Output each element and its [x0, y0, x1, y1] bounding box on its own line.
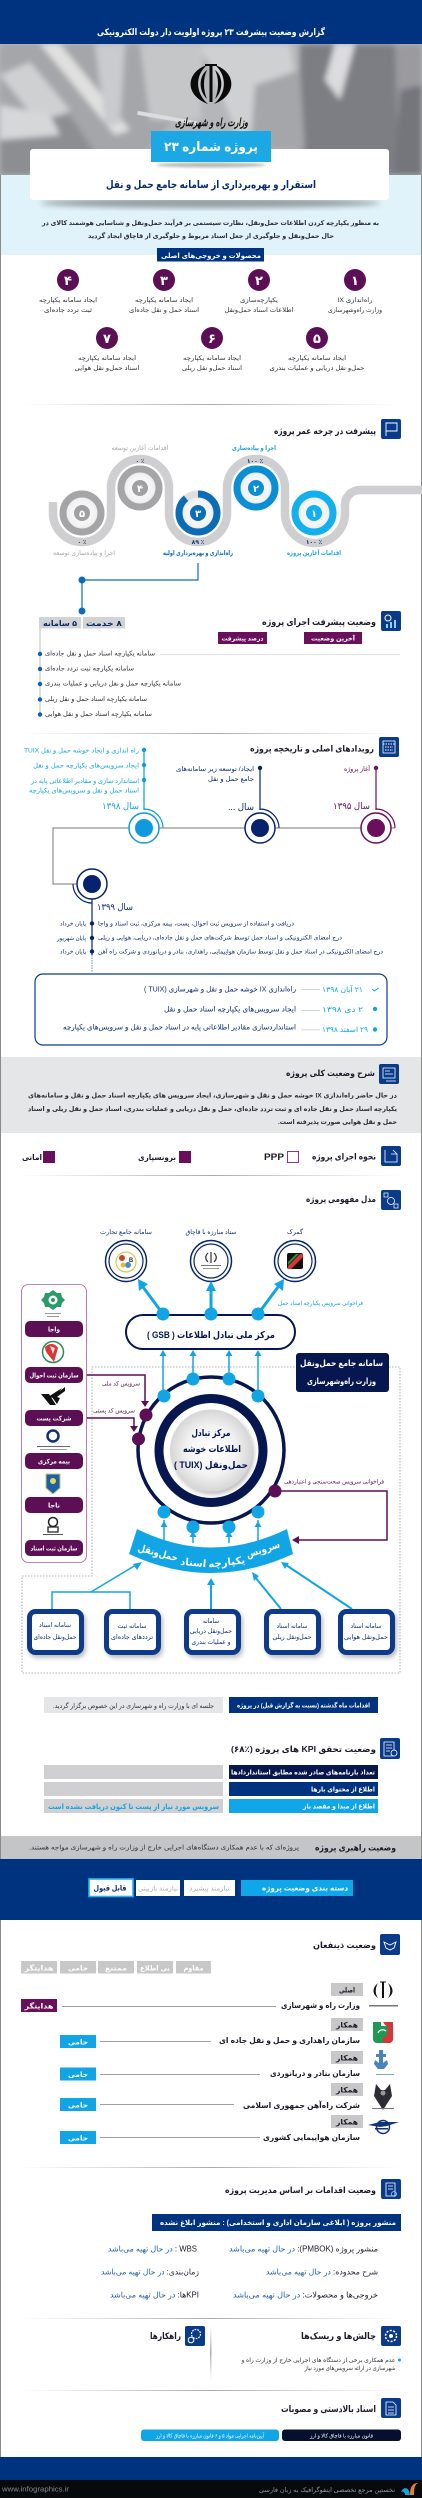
product 6: ایجاد سامانه یکپارچه [183, 355, 241, 362]
milestones box: ایجاد سرویس‌های یکپارچه اسناد حمل و نقل [164, 1004, 296, 1014]
leadership status band [1, 1836, 421, 1859]
node 1395: آغاز پروژه [344, 764, 371, 773]
product 6: ۶ [208, 331, 216, 346]
hero photo [0, 44, 422, 175]
customs [274, 1228, 316, 1282]
stage 2: ۲ [253, 484, 259, 495]
stakeholder: civil aviation: حامی [68, 2136, 88, 2142]
cyan arrows to external systems [143, 1287, 278, 1314]
product 3: اسناد حمل و نقل جاده‌ای [129, 307, 199, 314]
stage 3: ۳ [195, 509, 201, 520]
product 2: ۲ [255, 273, 263, 288]
systems list: سامانه یکپارچه ثبت تردد جاده‌ای [45, 664, 134, 672]
product 3 [129, 269, 199, 314]
customs: گمرک [287, 1228, 303, 1236]
stage 4: اقدامات آغازین توسعه [112, 443, 169, 452]
footer: www.infographics.ir [1, 2484, 70, 2494]
stage 2 [232, 445, 278, 510]
chip: post [25, 1410, 83, 1426]
last month actions: اقدامات ماه گذشته (نسبت به گزارش قبل) در پروژه [237, 1702, 370, 1710]
node 1399: پایان شهریور [56, 936, 86, 942]
chip: documents registry [25, 1540, 83, 1556]
node ...: سال ... [228, 802, 254, 812]
maritime: حمل‌ونقل دریایی [190, 1628, 232, 1635]
integrated service banner: حمل‌ونقل [136, 1543, 179, 1564]
TUIX ring hub: حمل‌ونقل (TUIX ) [174, 1460, 248, 1471]
stakeholder legend: مقاوم [184, 1966, 204, 1972]
KPI rows: سرویس مورد نیاز از پست تا کنون دریافت نشده است [48, 1802, 219, 1811]
milestones box: راه‌اندازی IX خوشه حمل و نقل و شهرسازی (TUIX ) [144, 984, 296, 994]
chip: central insurance [25, 1453, 83, 1469]
section heading: KPI: وضعیت تحقق KPI های پروژه (٪۶۸) [231, 1744, 376, 1755]
footer: نخستین مرجع تخصصی اینفوگرافیک به زبان فارسی [259, 2486, 395, 2494]
title card [30, 149, 389, 208]
road documents [30, 1612, 82, 1652]
TUIX ring hub: مرکز تبادل [192, 1428, 231, 1439]
trade system: سامانه جامع تجارت [100, 1229, 152, 1236]
KPI rows [44, 1765, 378, 1813]
systems list: سامانه یکپارچه حمل و نقل دریایی و عملیات بندری [45, 680, 181, 688]
product 2: یکپارچه‌سازی [240, 297, 278, 304]
integrated service banner: یکپارچه [208, 1555, 246, 1571]
product 4 [39, 269, 97, 314]
project execution method: امانی [22, 1153, 42, 1162]
project category band: نیازمند پیشبرد [190, 1886, 230, 1892]
product 7: اسناد حمل‌و نقل هوایی [74, 365, 140, 372]
challenges and risks: چالش‌ها و ریسک‌ها [301, 2331, 376, 2342]
stakeholder: road maintenance: همکار [335, 2020, 358, 2030]
project number banner [151, 131, 271, 162]
upstream documents: قانون مبارزه با قاچاق کالا و ارز [309, 2432, 373, 2440]
product 2 [224, 269, 294, 314]
stakeholder: ministry: وزارت راه و شهرسازی [281, 2001, 360, 2010]
node ... [176, 766, 279, 843]
road documents: سامانه اسناد [39, 1622, 71, 1629]
logo: intelligence [41, 1290, 65, 1317]
chip: police [25, 1497, 83, 1513]
solutions [150, 2326, 205, 2346]
node ...: ایجاد/ توسعه زیر سامانه‌های [176, 766, 254, 773]
chip: vaja: واجا [48, 1326, 60, 1334]
node 1399: درج امضای الکترونیکی و اسناد حمل توسط شرکت‌های حمل و نقل جاده‌ای، دریایی، هوایی و ریلی [98, 934, 342, 942]
product 4: ایجاد سامانه یکپارچه [39, 297, 97, 304]
status chips [218, 632, 362, 644]
section heading: main events: رویدادهای اصلی و تاریخچه پروژه [250, 744, 374, 754]
stakeholder: ports: حامی [68, 2072, 88, 2079]
road traffic: ترددهای جاده‌ای [111, 1634, 153, 1641]
logo: post [41, 1387, 65, 1405]
service and system counts: ۵ سامانه [43, 619, 77, 628]
section heading: lifecycle progress [274, 419, 401, 439]
integrated service banner [129, 1520, 293, 1573]
project category band: نیازمند بازبینی [138, 1886, 178, 1892]
trade system [100, 1229, 152, 1282]
air: حمل‌ونقل هوایی [344, 1634, 388, 1641]
intro paragraph [41, 218, 379, 240]
project management items: KPIها: در حال تهیه می‌باشد [110, 2290, 199, 2300]
project management items: WBS : در حال تهیه می‌باشد [108, 2244, 197, 2254]
stakeholder legend: ممتنع [105, 1966, 127, 1972]
project management items [101, 2244, 378, 2300]
product 4: ۴ [64, 273, 72, 288]
node 1399 [56, 869, 383, 972]
section heading: stakeholders [313, 1934, 400, 1955]
stakeholder: railways [60, 2083, 394, 2111]
title card: استقرار و بهره‌برداری از سامانه جامع حمل و نقل [106, 179, 316, 191]
stakeholder legend: حامی [68, 1966, 88, 1972]
product 1: وزارت راه‌وشهرسازی [328, 307, 382, 314]
chip: documents registry: سازمان ثبت اسناد [30, 1546, 78, 1552]
solutions: راهکارها [150, 2331, 181, 2342]
project execution method [22, 1146, 401, 1166]
section heading: execution progress: وضعیت پیشرفت اجرای پروژه [262, 617, 376, 628]
KPI rows: تعداد بارنامه‌های صادر شده مطابق استانداردادها [231, 1770, 375, 1776]
stage 1: ٪ ۱۰۰ [306, 540, 322, 546]
trade system: B [129, 1258, 134, 1264]
ministry emblem [175, 64, 248, 129]
rail: سامانه اسناد [276, 1623, 308, 1630]
products heading [157, 248, 264, 262]
stage 1: ۱ [311, 509, 317, 520]
leadership status band: پروژه‌ای که با عدم همکاری دستگاه‌های اجرایی خارج از وزارت راه و شهرسازی مواجه هستند. [29, 1844, 299, 1852]
section heading: project management: وضعیت اقدامات بر اساس مدیریت پروژه [225, 2185, 376, 2196]
intro paragraph: حال حمل‌ونقل و جلوگیری از جعل اسناد مربوط و جلوگیری از قاچاق ایجاد گردید [88, 232, 334, 240]
stage 2: اجرا و پیاده‌سازی [232, 445, 276, 452]
section heading: main events [250, 737, 399, 757]
project number banner: پروژه شماره ۲۳ [164, 139, 258, 154]
project category band: قابل قبول [94, 1884, 127, 1892]
air [340, 1612, 392, 1652]
milestones box: ۲ دی ۱۳۹۸ [322, 1005, 363, 1014]
rail: حمل‌ونقل ریلی [272, 1634, 312, 1641]
stakeholder: railways: همکار [335, 2086, 358, 2094]
last month actions [44, 1697, 378, 1713]
panel: overall project status: شرح وضعیت کلی پروژه [286, 1068, 375, 1079]
maritime [186, 1612, 238, 1652]
stage 4: ٪ ۰ [135, 459, 145, 465]
node 1399: درج امضای الکترونیکی در اسناد حمل و نقل توسط سازمان هواپیمایی، راهداری، بنادر و دریانوردی و شرکت راه آهن [98, 946, 383, 956]
systems list: سامانه یکپارچه اسناد حمل و نقل جاده‌ای [45, 650, 155, 658]
intro paragraph: به منظور یکپارچه کردن اطلاعات حمل‌ونقل، نظارت سیستمی بر فرآیند حمل‌ونقل و شناسایی هوشمند کالای در [41, 218, 379, 227]
panel: overall project status: حمل و نقل هوایی صورت پذیرفته است. [278, 1119, 397, 1126]
product items [39, 269, 382, 372]
road traffic [106, 1612, 158, 1652]
stage 5: ٪ ۰ [77, 540, 87, 546]
call label: فراخوانی سرویس یکپارچه اسناد حمل [278, 1300, 363, 1307]
header bar [0, 0, 422, 44]
product 5: حمل‌و نقل دریایی و عملیات بندری [270, 365, 365, 372]
rail [266, 1612, 318, 1652]
milestones box: ۲۱ آبان ۱۳۹۸ [322, 984, 363, 994]
product 5: ۵ [313, 331, 321, 346]
lifecycle wave chart [53, 443, 422, 557]
product 5 [270, 327, 365, 372]
road documents: حمل‌ونقل جاده‌ای [34, 1634, 77, 1641]
project management items: شرح محدوده: در حال تهیه می‌باشد [266, 2268, 378, 2276]
KPI rows: اطلاع از محتوای بارها [311, 1786, 375, 1794]
section heading: KPI [231, 1738, 400, 1759]
section heading: project management [225, 2179, 401, 2199]
road traffic: سامانه ثبت [118, 1623, 146, 1630]
connector from stage 3 to status list [78, 563, 198, 614]
node 1398 [24, 748, 163, 843]
chip: civil registry [25, 1367, 83, 1383]
stage 5: اجرا و پیاده‌سازی توسعه [53, 550, 115, 557]
stakeholder: ports [60, 2050, 394, 2080]
KPI rows: اطلاع از مبدا و مقصد بار [302, 1804, 375, 1810]
section heading: conceptual model [306, 1190, 401, 1210]
project execution method: PPP [264, 1152, 284, 1162]
purple service links: سرویس کد پستی [93, 1408, 135, 1414]
stage 4: ۴ [137, 484, 143, 495]
dashed system boundary [22, 1367, 400, 1673]
product 7: ۷ [103, 331, 111, 346]
product 1: راه‌اندازی IX [338, 297, 372, 304]
stage 3: راه‌اندازی و بهره‌برداری اولیه [163, 550, 233, 557]
product 5: ایجاد سامانه یکپارچه [288, 355, 346, 362]
stage 3: ٪ ۸۹ [192, 540, 205, 546]
chip: vaja [25, 1321, 83, 1337]
product 2: اطلاعات اسناد حمل‌ونقل [224, 307, 294, 314]
GSB pill [126, 1308, 295, 1349]
chip: post: شرکت پست [36, 1416, 72, 1422]
node 1398: سال ۱۳۹۸ [102, 801, 139, 811]
node 1398: اسناد حمل و نقل و سرویس‌های یکپارچه [29, 788, 139, 794]
conceptual model diagram [22, 1228, 400, 1673]
service and system counts: ۸ خدمت [86, 619, 122, 628]
systems list [38, 628, 400, 718]
section heading: lifecycle progress: پیشرفت در چرخه عمر پروژه [274, 426, 376, 437]
stakeholder: railways: شرکت راه‌آهن جمهوری اسلامی [243, 2100, 360, 2110]
TUIX ring hub [138, 1377, 284, 1523]
logo: documents registry [43, 1518, 63, 1535]
stakeholder: civil aviation: همکار [335, 2118, 358, 2126]
product 3: ۳ [160, 273, 168, 288]
stakeholders list [21, 1982, 399, 2144]
chip: police: ناجا [48, 1502, 60, 1510]
products heading: محصولات و خروجی‌های اصلی [161, 253, 261, 260]
milestones box: ۲۹ اسفند ۱۳۹۸ [322, 1025, 368, 1034]
integrated service banner: اسناد [180, 1557, 207, 1570]
challenges and risks [240, 2326, 401, 2372]
logo: central insurance [37, 1430, 70, 1450]
system label box [296, 1353, 389, 1392]
milestones box: استانداردسازی مقادیر اطلاعاتی پایه در اسناد حمل و نقل و سرویس‌های یکپارچه [63, 1022, 296, 1032]
stakeholder: ministry: هدایتگر [23, 2002, 54, 2010]
product 1: ۱ [351, 273, 359, 288]
arrows from source systems [52, 1562, 352, 1610]
stakeholder legend: بی اطلاع [140, 1966, 170, 1972]
stage 2: ٪ ۱۰۰ [247, 459, 263, 465]
project charter bar: منشور پروژه ( ابلاغی سازمان اداری و استخدامی) : منشور ابلاغ نشده [160, 2218, 396, 2227]
stakeholder: civil aviation [60, 2115, 399, 2144]
section heading: execution progress [262, 611, 401, 631]
anti-smuggling HQ [186, 1229, 236, 1282]
panel: overall project status [1, 1057, 421, 1133]
challenges and risks: عدم همکاری برخی از دستگاه های اجرایی خارج از وزارت راه و [240, 2356, 396, 2364]
purple service links: فراخوانی سرویس صحت‌سنجی و اعتبارذهی [284, 1478, 384, 1486]
GSB pill: مرکز ملی تبادل اطلاعات ( GSB ) [147, 1330, 275, 1341]
stage 3 [163, 490, 233, 557]
stakeholder: ministry: اصلی [339, 1986, 355, 1994]
systems list: سامانه یکپارچه اسناد حمل و نقل ریلی [45, 695, 147, 703]
external systems [100, 1228, 316, 1282]
hub cyan nodes [158, 1372, 264, 1534]
project management items: منشور پروژه (PMBOK): در حال تهیه می‌باشد [229, 2244, 378, 2254]
maritime: و عملیات بندری [192, 1639, 230, 1646]
stage 5: ۵ [79, 509, 85, 520]
stage 4 [112, 443, 169, 510]
upstream documents: اسناد بالادستی و مصوبات [281, 2404, 376, 2415]
node 1399: پایان خرداد [60, 922, 86, 928]
project management items: خروجی‌ها و محصولات: در حال تهیه می‌باشد [233, 2290, 378, 2300]
integrated service banner: سرویس [245, 1539, 282, 1561]
status chips: درصد پیشرفت [222, 636, 264, 642]
logo: police [46, 1474, 60, 1494]
stakeholder legend: هدایتگر [23, 1964, 54, 1972]
product 4: ثبت تردد جاده‌ای [44, 307, 92, 314]
stakeholder: railways: حامی [68, 2102, 88, 2110]
stage 5 [53, 490, 115, 557]
stakeholder: road maintenance: حامی [68, 2040, 88, 2046]
air: سامانه اسناد [350, 1623, 382, 1630]
stakeholder: ministry [21, 1982, 398, 2012]
purple service links: سرویس کد ملی [102, 1380, 140, 1388]
purple service links [84, 1375, 387, 1544]
ministry emblem: وزارت راه و شهرسازی [175, 117, 248, 129]
project category band: دسته بندی وضعیت پروژه [262, 1884, 348, 1892]
stage 1 [287, 490, 341, 557]
project execution method: نحوه اجرای پروژه [312, 1152, 376, 1162]
status chips: آخرین وضعیت [311, 634, 356, 642]
node 1399: سال ۱۳۹۹ [97, 902, 133, 912]
logo: civil registry [42, 1342, 64, 1362]
project execution method: برونسپاری [138, 1153, 176, 1162]
product 7: ایجاد سامانه یکپارچه [78, 355, 136, 362]
project category band [0, 1859, 422, 1920]
product 6: اسناد حمل‌و نقل ریلی [182, 365, 242, 372]
timeline [24, 748, 395, 972]
project charter bar [152, 2214, 401, 2231]
stakeholder: ports: سازمان بنادر و دریانوردی [270, 2069, 360, 2078]
panel: overall project status: در حال حاضر راه‌اندازی IX خوشه حمل و نقل و شهرسازی، ایجاد سرویس های یکپارچه اسناد حمل و نقل و سامانه‌های [28, 1092, 398, 1100]
maritime: سامانه [203, 1618, 219, 1625]
stakeholder: road maintenance: سازمان راهداری و حمل و نقل جاده ای [219, 2036, 360, 2045]
node 1398: ایجاد سرویس‌های یکپارچه حمل و نقل [33, 762, 139, 770]
node 1399: دریافت و استفاده از سرویس ثبت احوال، پست، بیمه مرکزی، ثبت اسناد و واجا [98, 920, 294, 928]
product 1 [328, 269, 382, 314]
milestones box [35, 974, 387, 1045]
stakeholder: ports: همکار [335, 2054, 358, 2062]
stakeholder: road maintenance [60, 2018, 393, 2048]
left panel: external service providers [22, 1284, 86, 1562]
anti-smuggling HQ: ستاد مبارزه با قاچاق [186, 1229, 236, 1236]
chip: central insurance: بیمه مرکزی [38, 1458, 70, 1466]
project management items: زمان‌بندی: در حال تهیه می‌باشد [101, 2268, 199, 2276]
TUIX ring hub: اطلاعات خوشه [183, 1444, 241, 1455]
system label box: وزارت راه‌وشهرسازی [307, 1376, 376, 1387]
stage 1: اقدامات آغازین پروژه [287, 548, 341, 557]
upstream documents: آیین‌نامه اجرایی مواد ۵ و ۶ قانون مبارزه با قاچاق کالا و ارز [155, 2432, 264, 2440]
upstream documents [141, 2398, 401, 2441]
stakeholder legend [21, 1961, 211, 1974]
node ...: جامع حمل و نقل [208, 776, 254, 783]
node 1395: سال ۱۳۹۵ [333, 801, 370, 811]
arrows between GSB and hub [160, 1350, 262, 1396]
challenges and risks: شهرسازی در ارائه سرویس‌های مورد نیاز [304, 2366, 396, 2372]
section heading: conceptual model: مدل مفهومی پروژه [306, 1194, 376, 1205]
node 1399: پایان خرداد [60, 950, 86, 956]
node 1398: راه اندازی و ایجاد خوشه حمل و نقل TUIX [24, 748, 139, 754]
product 6 [182, 327, 242, 372]
stakeholder: civil aviation: سازمان هواپیمایی کشوری [263, 2133, 360, 2142]
panel: overall project status: یکپارچه اسناد حمل و نقل جاده ای و ثبت تردد جاده‌ای، حمل و نقل دریایی و عملیات بندری، اسناد حمل و نقل ریلی و اسناد [28, 1105, 397, 1113]
footer [0, 2457, 422, 2498]
section heading: stakeholders: وضعیت ذینفعان [313, 1940, 376, 1951]
system label box: سامانه جامع حمل‌ونقل [300, 1358, 383, 1369]
header bar: گزارش وضعیت پیشرفت ۲۳ پروژه اولویت دار دولت الکترونیکی [97, 26, 326, 38]
source system boxes [30, 1612, 392, 1652]
chip: civil registry: سازمان ثبت احوال [30, 1372, 78, 1380]
product 7 [74, 327, 140, 372]
node 1398: استاندارد سازی و مقادیر اطلاعاتی پایه در [30, 778, 139, 785]
product 3: ایجاد سامانه یکپارچه [135, 297, 193, 304]
service and system counts [39, 617, 125, 628]
arrowheads to external systems [138, 1279, 284, 1291]
node 1395 [333, 764, 395, 843]
last month actions: جلسه ای با وزارت راه و شهرسازی در این خصوص برگزار گردید. [53, 1702, 214, 1710]
leadership status band: وضعیت راهبری پروژه [315, 1842, 396, 1854]
systems list: سامانه یکپارچه اسناد حمل و نقل هوایی [45, 710, 152, 718]
